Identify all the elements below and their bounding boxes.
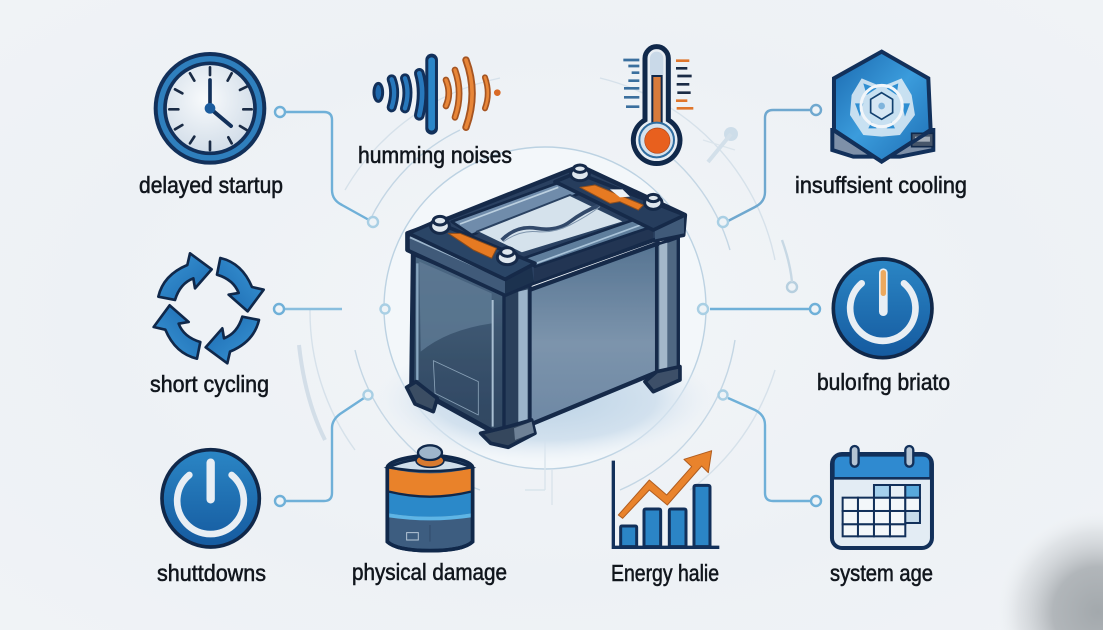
icon: hexagon fan (832, 52, 933, 162)
feet (407, 382, 437, 412)
label: humming noises: humming noises (358, 142, 512, 168)
connector: system age (718, 390, 821, 506)
icon: small battery (387, 445, 473, 551)
right pillar (657, 237, 678, 377)
left face (412, 253, 505, 438)
battery illustration (407, 165, 685, 447)
icon: bar chart with arrow (613, 451, 719, 547)
faint wrench mark (708, 127, 738, 162)
label: energy halie: Energy halie (611, 560, 719, 586)
icon: clock (156, 54, 264, 163)
back bar (555, 173, 685, 230)
connector: power button right (698, 240, 820, 314)
label: bulorifng briato: buloıfng briato (817, 369, 950, 395)
icon: calendar (832, 446, 932, 548)
label: physical damage: physical damage (352, 559, 507, 585)
wavy cable (502, 205, 600, 240)
label: insufficient cooling: insuffsient cooling (795, 172, 967, 198)
connector: delayed startup (275, 107, 378, 227)
label: short cycling: short cycling (150, 371, 269, 397)
terminal posts (431, 165, 662, 265)
smudge in bottom right corner (995, 510, 1103, 630)
lid (407, 166, 685, 295)
label: system age: system age (830, 560, 933, 586)
label on left face (433, 361, 478, 415)
rails and top panel (452, 183, 580, 235)
icon: power button right (833, 259, 932, 358)
label: delayed startup: delayed startup (139, 172, 283, 198)
label: shutdowns: shuttdowns (157, 560, 266, 586)
connector: short cycling (274, 304, 390, 314)
connector: insufficient cooling (718, 105, 821, 227)
icon: cycle arrows (154, 253, 264, 363)
front bar (408, 222, 535, 279)
orange straps (580, 185, 643, 210)
glow under battery (375, 338, 715, 462)
icon: sound waves (374, 60, 501, 128)
connector: shutdowns (275, 390, 372, 506)
concentric rings behind battery (299, 78, 775, 505)
corner pillar (504, 285, 530, 440)
right face (529, 243, 658, 425)
icon: power button left (162, 450, 259, 547)
icon: thermometer (623, 47, 693, 164)
